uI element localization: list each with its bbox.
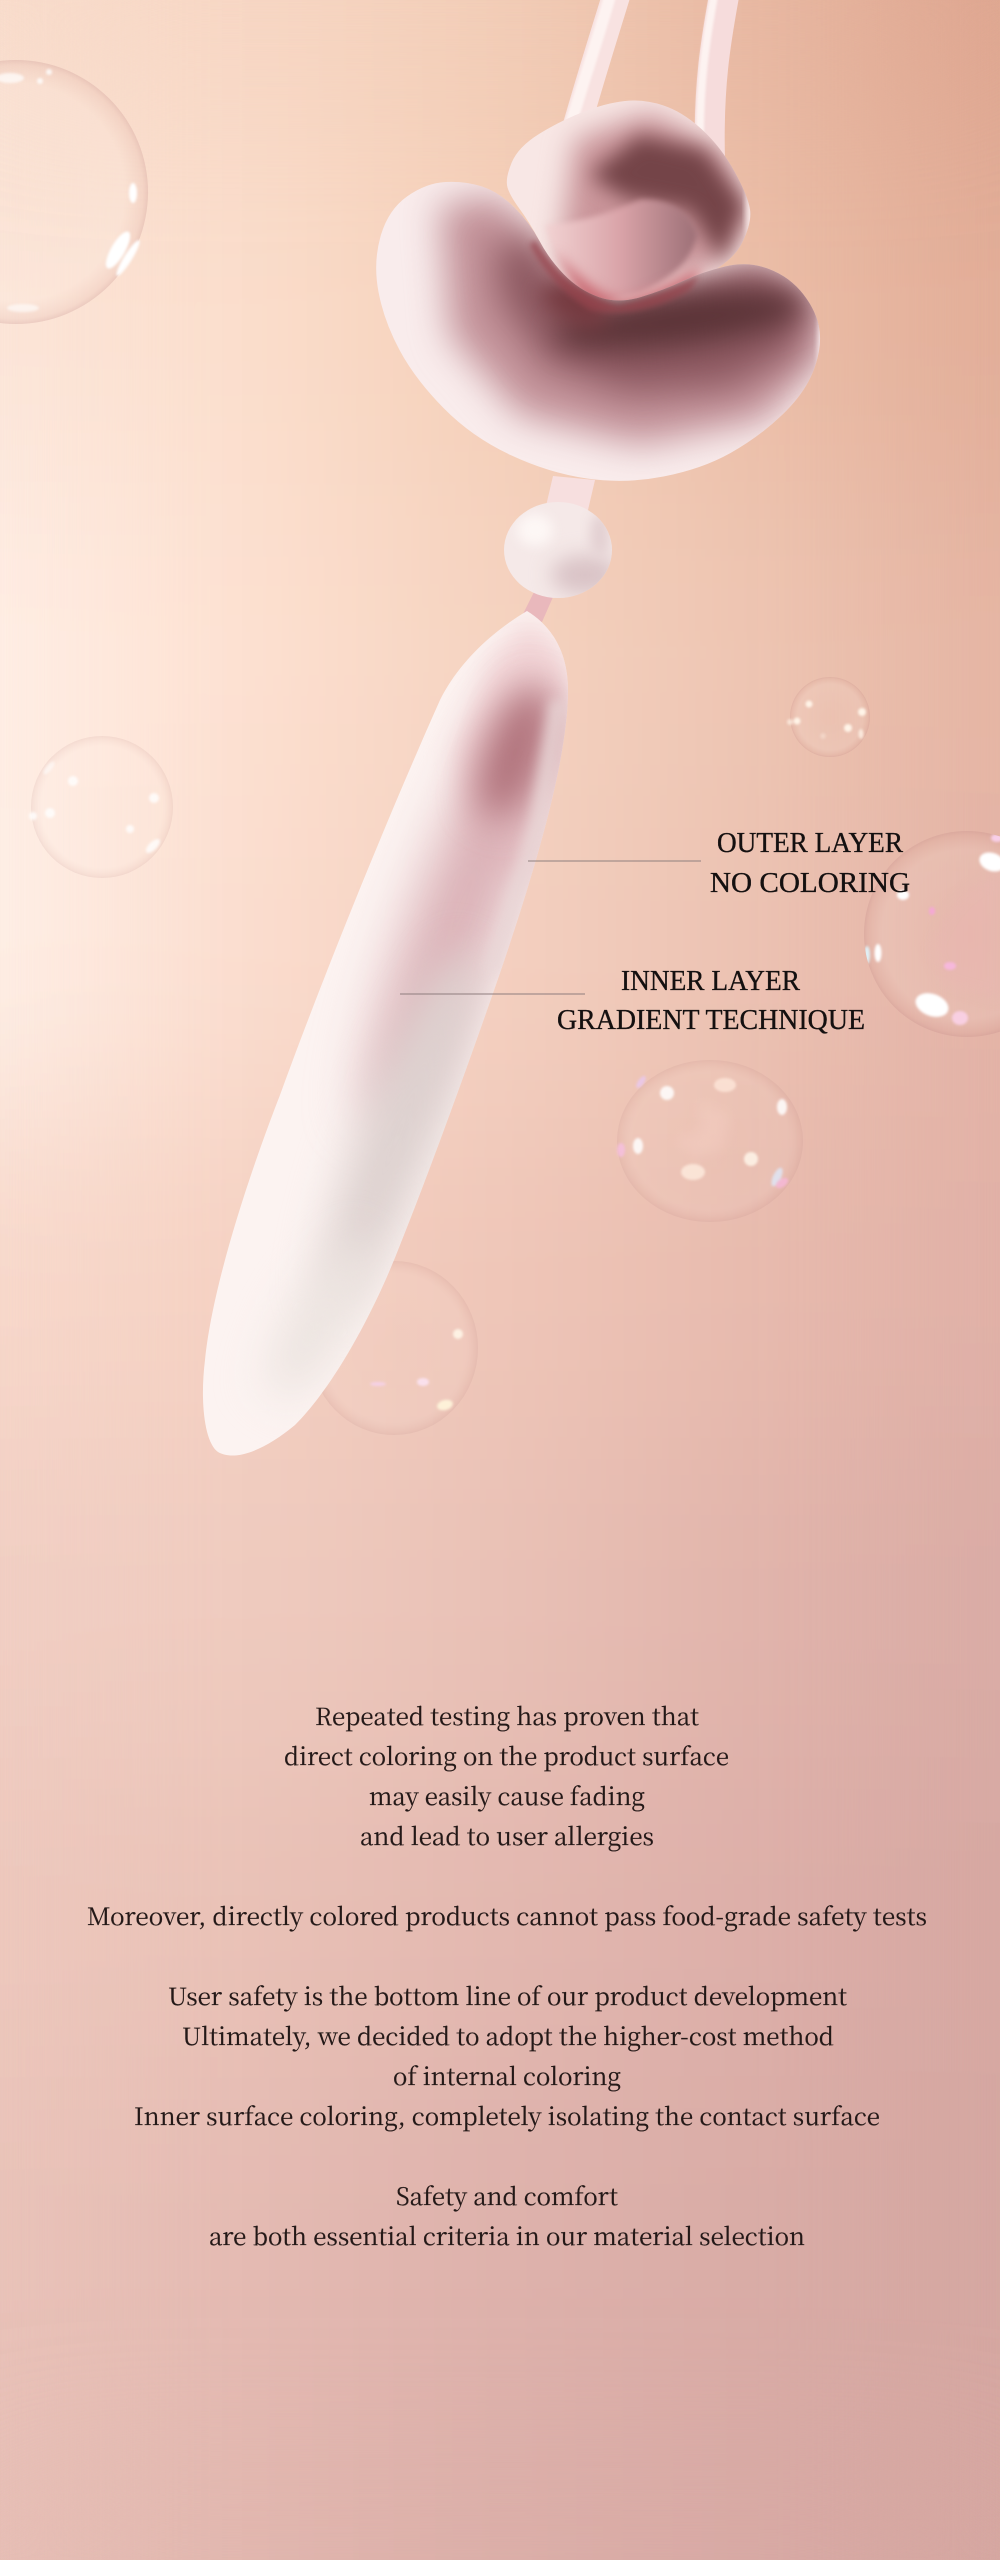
text block: explanation: of internal coloring (393, 2057, 621, 2092)
product: lower heart lobe (376, 182, 820, 481)
label: inner layer gradient technique: GRADIENT TECHNIQUE (557, 1004, 865, 1036)
product: upper lobe (506, 100, 750, 300)
bubble: behind product (310, 1261, 478, 1435)
bubble: mid left (29, 736, 173, 878)
product: bead (504, 502, 612, 598)
text block: explanation: are both essential criteria in our material selection (209, 2217, 805, 2252)
product: neck below bead (520, 592, 553, 622)
text block: explanation: and lead to user allergies (360, 1817, 654, 1852)
product: cord strings (566, 0, 724, 160)
bubble: small right (787, 677, 870, 757)
label: outer layer no coloring: NO COLORING (710, 867, 910, 899)
bubble: top left (0, 60, 148, 324)
text block: explanation: may easily cause fading (369, 1777, 645, 1812)
product: neck above bead (546, 476, 595, 510)
product: long pendant body (203, 611, 568, 1456)
text block: explanation: Safety and comfort (396, 2177, 618, 2212)
bubble: large right (864, 831, 1000, 1037)
callout line: inner layer (400, 994, 585, 995)
callout line: outer layer (528, 860, 701, 862)
text block: explanation: User safety is the bottom line of our product development (168, 1977, 847, 2012)
text block: explanation: Moreover, directly colored products cannot pass food-grade safety tests (87, 1897, 927, 1932)
bubble: center right (617, 1060, 803, 1222)
text block: explanation: Repeated testing has proven that (315, 1697, 699, 1732)
text block: explanation (87, 1697, 927, 2252)
text block: explanation: Inner surface coloring, completely isolating the contact surface (134, 2097, 880, 2132)
label: inner layer gradient technique: INNER LAYER (621, 965, 801, 997)
label: outer layer no coloring: OUTER LAYER (717, 827, 904, 859)
label: inner layer gradient technique (557, 965, 865, 1036)
label: outer layer no coloring (710, 827, 910, 899)
text block: explanation: Ultimately, we decided to adopt the higher-cost method (182, 2017, 834, 2052)
text block: explanation: direct coloring on the product surface (284, 1737, 729, 1772)
